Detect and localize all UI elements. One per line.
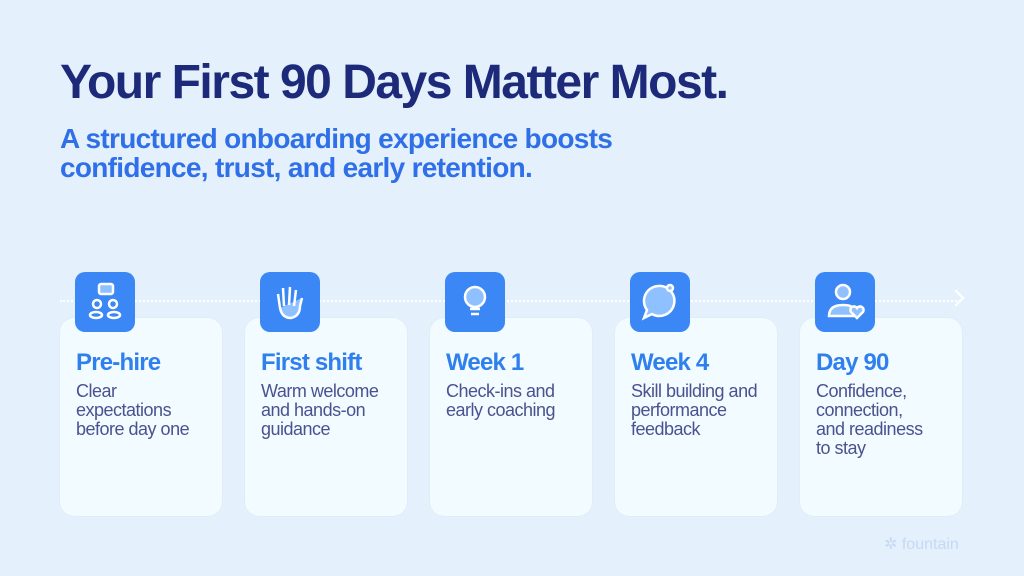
subtitle: A structured onboarding experience boosts	[60, 123, 612, 154]
card: week 4: Skill building and performance feedback	[631, 381, 757, 439]
card: day 90: Confidence, connection, and readiness to stay	[816, 381, 923, 458]
icon: bulb	[445, 272, 505, 332]
card: week 4: Week 4	[631, 349, 708, 376]
card: week 4	[615, 318, 777, 516]
icon: chat bubble	[630, 272, 690, 332]
card: first shift	[245, 318, 407, 516]
timeline line	[60, 300, 960, 302]
card: pre-hire	[60, 318, 222, 516]
subtitle	[60, 123, 612, 183]
card: day 90: Day 90	[816, 349, 889, 376]
icon: people chat	[75, 272, 135, 332]
card: week 1: Check-ins and early coaching	[446, 381, 555, 420]
card: day 90	[800, 318, 962, 516]
icon: person heart	[815, 272, 875, 332]
card: week 1	[430, 318, 592, 516]
subtitle: confidence, trust, and early retention.	[60, 152, 532, 183]
logo: ✲ fountain	[884, 536, 959, 553]
card: pre-hire: Pre-hire	[76, 349, 160, 376]
title: Your First 90 Days Matter Most.	[60, 56, 727, 109]
card: pre-hire: Clear expectations before day one	[76, 381, 189, 439]
card: first shift: First shift	[261, 349, 362, 376]
arrow	[948, 290, 964, 306]
card: first shift: Warm welcome and hands-on guidance	[261, 381, 378, 439]
card: week 1: Week 1	[446, 349, 523, 376]
icon: hand	[260, 272, 320, 332]
